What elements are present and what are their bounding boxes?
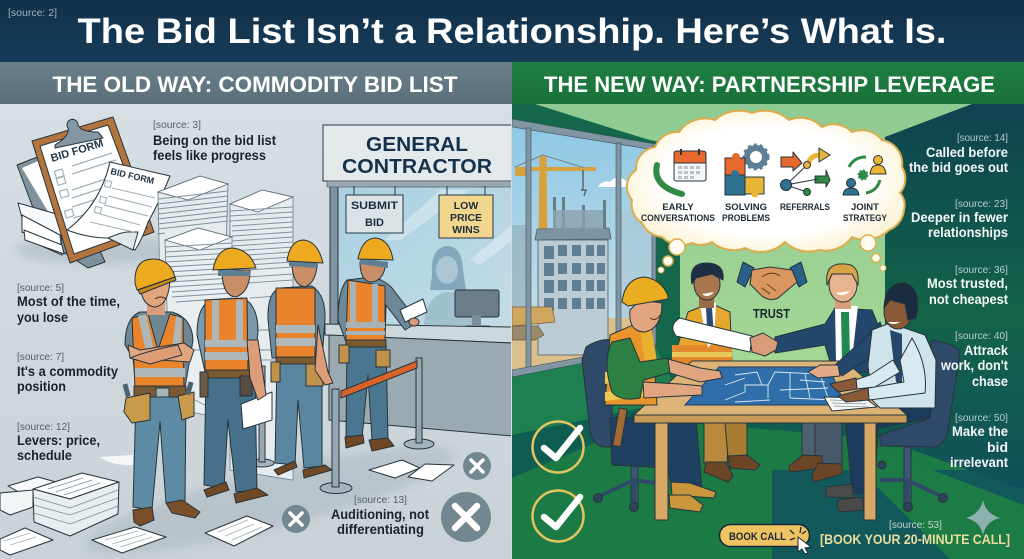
sign: submit bid: BID bbox=[365, 217, 384, 229]
label: early conversations: CONVERSATIONS bbox=[641, 213, 715, 224]
sign: submit bid: SUBMIT bbox=[351, 200, 398, 212]
icon: check mark 1 bbox=[532, 422, 584, 472]
label: joint strategy bbox=[843, 202, 888, 224]
illustration: clipboard and bid forms: BID FORM bbox=[110, 166, 155, 186]
worker 1 with crossed arms bbox=[123, 259, 200, 526]
text: commodity position: It's a commodity bbox=[17, 364, 118, 379]
text: levers: schedule bbox=[17, 448, 72, 463]
text: levers bbox=[18, 422, 100, 460]
sign: low price wins: LOW bbox=[454, 200, 478, 212]
heading: the new way: THE NEW WAY: PARTNERSHIP LEVERAGE bbox=[544, 72, 995, 97]
text: commodity position: position bbox=[17, 379, 66, 394]
person: seated worker in hard hat bbox=[605, 277, 722, 447]
text: make the bid irrelevant: irrelevant bbox=[950, 455, 1008, 470]
sign: general contractor: GENERAL bbox=[366, 133, 468, 156]
title band bbox=[0, 0, 1024, 62]
text: attrack work: Attrack bbox=[964, 343, 1008, 358]
text: attrack work: [source: 40] bbox=[955, 330, 1008, 342]
right dark wall bbox=[885, 104, 1024, 490]
worker 3 in line bbox=[268, 240, 333, 478]
text: commodity position bbox=[17, 351, 118, 394]
button: book call: BOOK CALL bbox=[729, 531, 786, 543]
icon: referrals bbox=[780, 148, 830, 196]
heading: the old way bbox=[0, 62, 512, 104]
sign: low price wins bbox=[439, 186, 493, 238]
text: make the bid irrelevant bbox=[950, 412, 1008, 470]
person: seated client in light blue bbox=[830, 283, 936, 408]
icon: handshake bbox=[737, 262, 807, 300]
label: solving problems: SOLVING bbox=[725, 202, 767, 213]
floor bbox=[512, 104, 972, 559]
stanchion: rear bbox=[256, 366, 274, 468]
text: called before bbox=[909, 132, 1008, 175]
window frame bbox=[512, 119, 656, 377]
illustration: clipboard and bid forms: BID FORM bbox=[49, 137, 105, 165]
text: auditioning: differentiating bbox=[337, 522, 424, 537]
legs: seated client bbox=[826, 400, 932, 512]
text: most trusted: Most trusted, bbox=[927, 276, 1008, 291]
sign: low price wins: PRICE bbox=[450, 212, 482, 224]
label: referrals: REFERRALS bbox=[780, 202, 830, 213]
booth window bbox=[330, 184, 512, 326]
ghost clerk behind the glass bbox=[424, 246, 474, 325]
text: deeper in fewer bbox=[911, 198, 1009, 240]
icon: small cross bbox=[463, 452, 491, 480]
text: call to action: [source: 53] bbox=[889, 519, 942, 531]
text: auditioning bbox=[331, 494, 429, 537]
icon: thought bubble with four ideas bbox=[627, 111, 905, 273]
text: most of the time: you lose bbox=[17, 310, 68, 325]
text: called before: Called before bbox=[926, 145, 1008, 160]
sign: general contractor: CONTRACTOR bbox=[342, 155, 492, 178]
text: being on the bid list: [source: 3] bbox=[153, 119, 201, 131]
text: most of the time: Most of the time, bbox=[17, 294, 120, 309]
text: most of the time bbox=[17, 282, 120, 325]
crane bbox=[514, 154, 596, 229]
table with blueprint bbox=[634, 361, 907, 520]
panel: the new way bbox=[512, 104, 1024, 559]
icon: large cross bbox=[441, 492, 491, 542]
sign: general contractor bbox=[323, 125, 518, 187]
legs: seated worker bbox=[610, 418, 716, 512]
icon: joint strategy bbox=[843, 156, 886, 195]
title: The Bid List Isn’t a Relationship. Here’s What Is. bbox=[78, 12, 946, 51]
illustration: general contractor booth bbox=[323, 125, 518, 436]
window view bbox=[512, 119, 656, 377]
person: suited partner bbox=[775, 264, 882, 482]
label: early conversations: EARLY bbox=[662, 202, 694, 213]
light back wall bbox=[530, 104, 972, 362]
text: most trusted: not cheapest bbox=[929, 292, 1008, 307]
text: make the bid irrelevant: bid bbox=[987, 440, 1008, 455]
icon: mouse cursor bbox=[798, 537, 811, 554]
text: being on the bid list: Being on the bid list bbox=[153, 133, 276, 148]
text: attrack work: work, don't bbox=[940, 358, 1008, 373]
monitor bbox=[455, 290, 499, 328]
worker 2 in line, holding a paper bbox=[197, 248, 272, 503]
text: deeper in fewer: relationships bbox=[928, 225, 1008, 240]
text: called before: [source: 14] bbox=[957, 132, 1008, 144]
icon: sparkle bbox=[966, 500, 1000, 535]
label: joint strategy: STRATEGY bbox=[843, 213, 888, 224]
text: most of the time: [source: 5] bbox=[17, 282, 64, 294]
text: auditioning: [source: 13] bbox=[354, 494, 407, 506]
icon: solving problems bbox=[725, 145, 768, 198]
paper on the table bbox=[824, 397, 877, 411]
text: most trusted: [source: 36] bbox=[955, 264, 1008, 276]
sign: low price wins: WINS bbox=[452, 224, 480, 236]
illustration: clipboard and bid forms bbox=[17, 117, 170, 268]
heading: the new way bbox=[512, 62, 1024, 104]
scattered paper pile bbox=[0, 455, 454, 555]
right chair bbox=[878, 340, 960, 512]
text: attrack work bbox=[940, 330, 1008, 389]
person: standing partner in yellow vest bbox=[672, 263, 760, 482]
text: commodity position: [source: 7] bbox=[17, 351, 64, 363]
text: call to action bbox=[820, 519, 1010, 547]
text: attrack work: chase bbox=[972, 374, 1008, 389]
text: levers: Levers: price, bbox=[17, 433, 100, 448]
text: being on the bid list: feels like progress bbox=[153, 148, 266, 163]
panel: the old way bbox=[0, 104, 518, 559]
label: joint strategy: JOINT bbox=[851, 202, 879, 213]
person: suit arm resting on table bbox=[808, 322, 888, 378]
left dark wedge bbox=[512, 104, 680, 400]
icon: early conversations bbox=[656, 149, 706, 194]
handshake between partners bbox=[750, 333, 778, 356]
label: early conversations bbox=[641, 204, 715, 221]
counter bbox=[325, 324, 512, 343]
text: levers: [source: 12] bbox=[17, 421, 70, 433]
text: make the bid irrelevant: Make the bbox=[952, 424, 1008, 439]
text: deeper in fewer: [source: 23] bbox=[955, 198, 1008, 210]
illustration: paper stacks bbox=[157, 176, 293, 480]
excavator bbox=[512, 307, 555, 340]
button: book call bbox=[720, 524, 811, 554]
stanchions with orange rope bbox=[320, 358, 434, 494]
worker 4 at the window bbox=[338, 238, 427, 451]
left chair bbox=[582, 340, 655, 512]
text: make the bid irrelevant: [source: 50] bbox=[955, 412, 1008, 424]
source tag: title: [source: 2] bbox=[8, 7, 57, 19]
text: most trusted bbox=[927, 264, 1008, 307]
icon: small cross bbox=[282, 505, 310, 533]
text: auditioning: Auditioning, not bbox=[331, 507, 429, 522]
sign: submit bid bbox=[346, 186, 403, 233]
text: being on the bid list bbox=[153, 119, 276, 163]
text: called before: the bid goes out bbox=[909, 160, 1008, 175]
building under construction bbox=[535, 197, 611, 355]
text: deeper in fewer: Deeper in fewer bbox=[911, 210, 1009, 225]
label: trust: TRUST bbox=[753, 307, 790, 321]
heading: the old way: THE OLD WAY: COMMODITY BID LIST bbox=[52, 72, 458, 97]
label: solving problems: PROBLEMS bbox=[722, 213, 770, 224]
label: solving problems bbox=[722, 202, 770, 224]
icon: check mark 2 bbox=[532, 490, 584, 542]
